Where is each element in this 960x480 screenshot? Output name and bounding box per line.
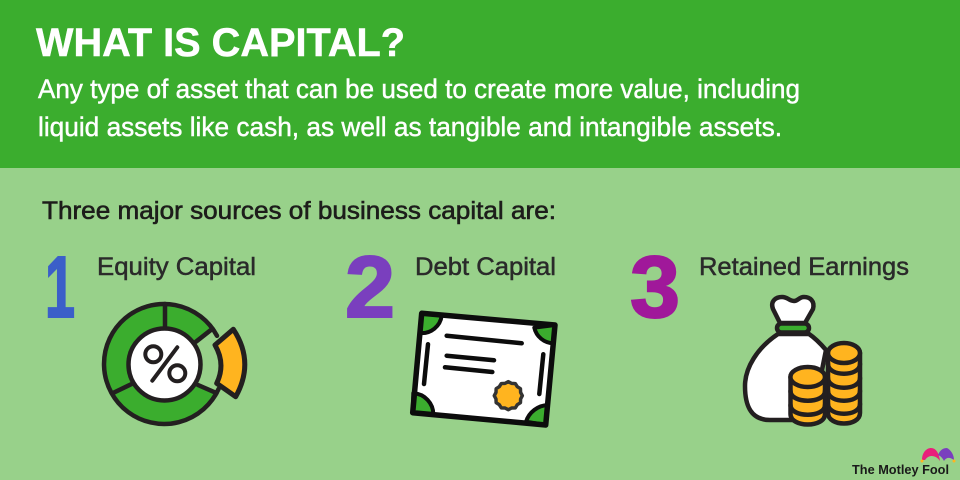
- logo: The Motley Fool: [852, 448, 956, 477]
- source 1: equity capital: [45, 239, 256, 424]
- icon: money bag and coins: [745, 297, 860, 424]
- icon: certificate: [413, 313, 555, 425]
- heading: debt capital: Debt Capital: [415, 253, 556, 281]
- definition text: Any type of asset that can be used to create more value, including: [38, 74, 800, 104]
- icon: donut chart with percent: [104, 304, 245, 424]
- source 2: debt capital: [345, 239, 556, 425]
- subheading: Three major sources of business capital are:: [42, 197, 556, 225]
- title: WHAT IS CAPITAL?: [36, 21, 405, 65]
- number 3: 3: [630, 239, 680, 336]
- source 3: retained earnings: [630, 239, 909, 424]
- panel: header band: [0, 0, 960, 168]
- icon: jester hat: [920, 448, 956, 462]
- heading: retained earnings: Retained Earnings: [699, 253, 909, 281]
- number 2: 2: [345, 239, 395, 336]
- number 1: 1: [45, 239, 75, 336]
- definition text: [38, 74, 800, 142]
- definition text: liquid assets like cash, as well as tangible and intangible assets.: [38, 112, 782, 142]
- logo wordmark: The Motley Fool: [852, 462, 949, 477]
- heading: equity capital: Equity Capital: [97, 253, 256, 281]
